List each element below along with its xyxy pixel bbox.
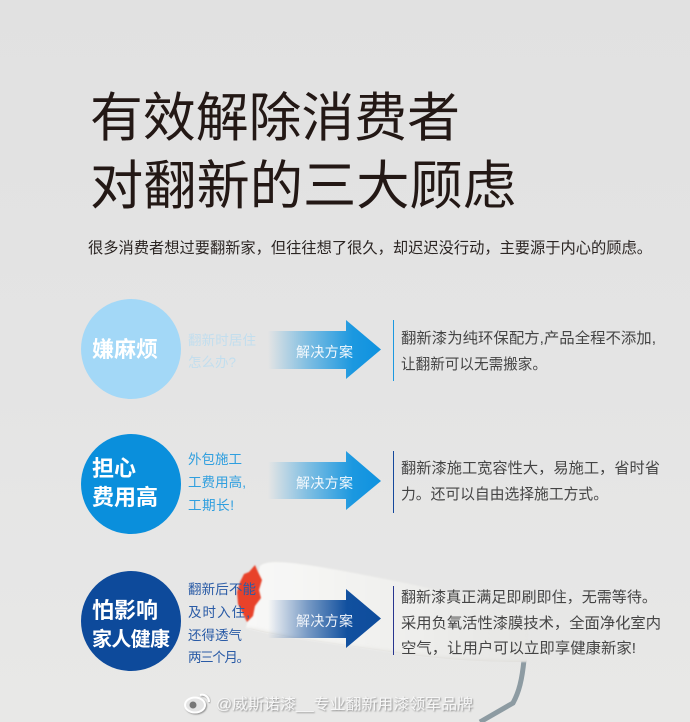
worry text 1	[188, 333, 256, 370]
arrow: solution 3	[268, 589, 381, 648]
worry text 2: 工费用高,	[188, 474, 246, 490]
worry text 3: 两三个月。	[188, 650, 250, 665]
icon: weibo	[185, 695, 209, 712]
arrow: solution 2	[268, 451, 381, 510]
circle: 怕影响家人健康	[81, 571, 181, 671]
divider and answer text 3: 采用负氧活性漆膜技术，全面净化室内	[401, 614, 661, 632]
arrow: solution 1	[268, 320, 381, 379]
divider and answer text 2: 翻新漆施工宽容性大，易施工，省时省	[401, 460, 660, 477]
title	[90, 89, 516, 216]
circle: 担心费用高	[81, 434, 181, 534]
circle: 嫌麻烦: 嫌麻烦	[92, 337, 158, 362]
illustration: paint roller	[237, 562, 530, 722]
panel: worry 2	[81, 434, 660, 534]
circle: 怕影响家人健康: 家人健康	[92, 627, 170, 651]
worry text 1: 翻新时居住	[188, 333, 256, 348]
circle: 怕影响家人健康: 怕影响	[92, 598, 158, 623]
subtitle: 很多消费者想过要翻新家，但往往想了很久，却迟迟没行动，主要源于内心的顾虑。	[88, 240, 652, 257]
worry text 3: 及时入住,	[188, 605, 250, 620]
divider and answer text 1: 让翻新可以无需搬家。	[401, 356, 547, 373]
arrow: solution 1: 解决方案	[296, 344, 353, 360]
divider and answer text 1: 翻新漆为纯环保配方,产品全程不添加,	[401, 329, 656, 347]
title: 有效解除消费者	[90, 89, 460, 148]
worry text 3	[188, 582, 256, 665]
circle: 担心费用高: 费用高	[92, 485, 158, 510]
worry text 2: 外包施工	[188, 452, 242, 467]
panel: worry 1	[81, 299, 656, 399]
divider and answer text 3: 翻新漆真正满足即刷即住，无需等待。	[401, 588, 657, 606]
title: 对翻新的三大顾虑	[90, 157, 516, 216]
divider and answer text 1	[393, 320, 656, 381]
arrow: solution 2: 解决方案	[296, 475, 353, 491]
worry text 1: 怎么办?	[188, 355, 236, 370]
circle: 嫌麻烦	[81, 299, 181, 399]
circle: 担心费用高: 担心	[92, 456, 136, 481]
panel: worry 3	[81, 571, 661, 671]
divider and answer text 3: 空气，让用户可以立即享健康新家!	[401, 640, 636, 657]
divider and answer text 2: 力。还可以自由选择施工方式。	[401, 486, 608, 503]
watermark: @威斯诺漆__专业翻新用漆领军品牌	[216, 696, 473, 713]
arrow: solution 3: 解决方案	[296, 613, 353, 629]
divider and answer text 2	[393, 451, 660, 513]
worry text 3: 翻新后不能	[188, 582, 256, 597]
worry text 2	[188, 452, 246, 513]
divider and answer text 3	[393, 586, 661, 657]
worry text 3: 还得透气	[188, 627, 242, 643]
worry text 2: 工期长!	[188, 498, 234, 513]
